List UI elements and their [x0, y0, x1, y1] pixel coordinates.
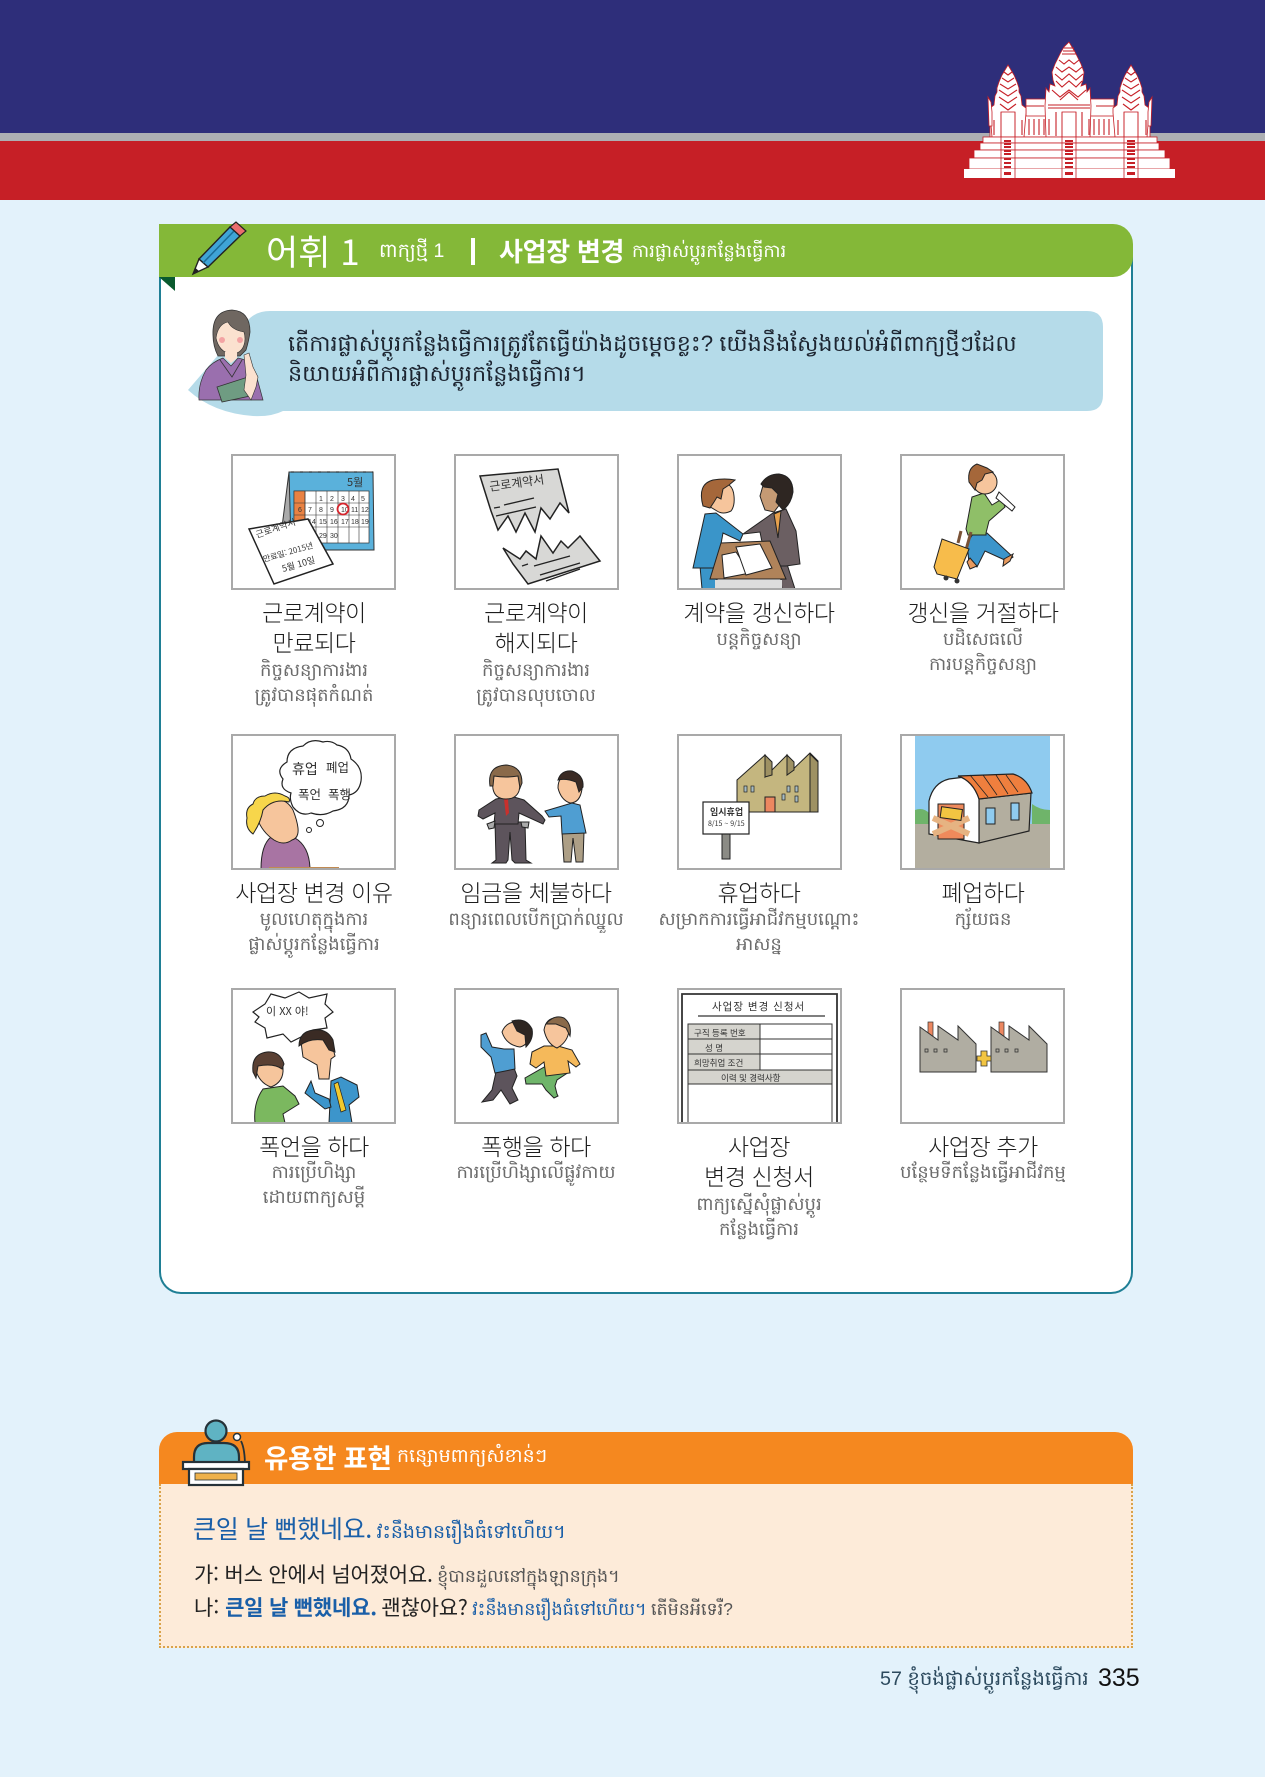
dialogue line B: 나: 큰일 날 뻔했네요. 괜찮아요? វះនឹងមានរឿងធំទៅហើយ។ តើមិនអីទេរឺ? [194, 1592, 733, 1622]
illustration: factory with closure sign [677, 734, 842, 870]
intro text: និយាយអំពីការផ្លាស់ប្តូរកន្លែងធ្វើការ។ [288, 361, 586, 386]
vocabulary item 7 [659, 734, 859, 954]
label: 사업장 추가 [928, 1128, 1038, 1162]
vocabulary item 1 [231, 454, 396, 707]
icon: teacher character [198, 310, 264, 402]
label: 사업장 변경 이유 [235, 874, 393, 908]
illustration: man thinking: 폭언 [298, 784, 321, 803]
translation: បន្ថែមទីកន្លែងធ្វើអាជីវកម្ម [900, 1162, 1066, 1182]
label [704, 1128, 814, 1192]
intro text [288, 329, 1017, 391]
illustration: man thinking: 폭행 [328, 784, 351, 803]
illustration: closed shop [900, 734, 1065, 870]
illustration: calendar and contract: 2 [330, 496, 334, 503]
illustration: calendar and contract: 14 [308, 519, 316, 526]
illustration: calendar and contract: 8 [319, 507, 323, 514]
illustration: calendar and contract: 7 [308, 507, 312, 514]
illustration: calendar and contract: 5월 10일 [280, 553, 317, 575]
illustration: man leaving with suitcase [900, 454, 1065, 590]
label: 근로계약이 [262, 594, 366, 628]
label: 휴업하다 [717, 874, 801, 908]
label [484, 594, 588, 658]
translation: ក្ស័យធន [955, 909, 1011, 929]
heading translation: កន្សោមពាក្យសំខាន់ៗ [397, 1446, 547, 1467]
orange header bar [159, 1432, 1133, 1484]
illustration: calendar and contract: 18 [351, 519, 359, 526]
vocabulary item 9 [231, 988, 396, 1208]
label: 폭언을 하다 [259, 1128, 369, 1162]
illustration: calendar and contract: 6 [298, 507, 302, 514]
dialogue line A: 가: 버스 안에서 넘어졌어요. ខ្ញុំបានដួលនៅក្នុងឡានក្រុង។ [194, 1559, 620, 1589]
translation: កិច្ចសន្យាការងារ [260, 660, 368, 680]
illustration: calendar and contract: 16 [330, 519, 338, 526]
vocabulary item 8 [900, 734, 1065, 930]
vocabulary item 5 [231, 734, 396, 958]
heading: vocabulary 1: 어휘 1 [266, 225, 360, 276]
expression headline: 큰일 날 뻔했네요. វះនឹងមានរឿងធំទៅហើយ។ [193, 1510, 566, 1546]
illustration: calendar and contract: 만료일: 2015년 [262, 540, 314, 565]
illustration: change application form: 희망취업 조건 [694, 1057, 743, 1069]
translation [255, 658, 373, 707]
illustration: calendar and contract: 29 [319, 533, 327, 540]
vocabulary item 6 [448, 734, 624, 933]
dotted border [159, 1484, 1133, 1648]
speech bubble with intro text [188, 311, 1103, 416]
translation [659, 908, 859, 954]
translation: ការប្រើហិង្សាលើផ្លូវកាយ [456, 1162, 616, 1182]
top banner: blue, grey and red bands with temple [0, 0, 1265, 200]
vocabulary item 4 [900, 454, 1065, 674]
translation: អាសន្ន [736, 934, 782, 954]
illustration: calendar and contract: 17 [341, 519, 349, 526]
vocabulary item 10 [454, 988, 619, 1186]
sub-heading: workplace change: 사업장 변경 [499, 232, 624, 269]
illustration: calendar and contract: 19 [361, 519, 369, 526]
illustration: calendar and contract: 1 [319, 496, 323, 503]
illustration: boss with empty pockets and worker [454, 734, 619, 870]
illustration: calendar and contract: 15 [319, 519, 327, 526]
sub-heading translation: ការផ្លាស់ប្តូរកន្លែងធ្វើការ [632, 241, 786, 261]
label: 근로계약이 [484, 594, 588, 628]
vocabulary item 11 [677, 988, 842, 1240]
translation: ការប្រើហិង្សា [272, 1162, 356, 1182]
translation: ត្រូវបានផុតកំណត់ [255, 685, 373, 705]
label: 계약을 갱신하다 [683, 594, 835, 628]
vocabulary item 3 [677, 454, 842, 650]
translation: ផ្លាស់ប្តូរកន្លែងធ្វើការ [248, 934, 380, 954]
translation: មូលហេតុក្នុងការ [260, 909, 368, 929]
translation: ពាក្យស្នើសុំផ្លាស់ប្តូរ [696, 1194, 822, 1214]
illustration: boss shouting at worker [231, 988, 396, 1124]
illustration: man thinking: 폐업 [326, 757, 349, 776]
icon: Angkor Wat temple [964, 42, 1175, 178]
grey stripe [0, 133, 1265, 141]
footer: page number: 335 [1098, 1664, 1140, 1692]
illustration: boss shouting at worker: 이 XX 야! [266, 1003, 309, 1019]
illustration: change application form: 사업장 변경 신청서 [712, 999, 805, 1014]
illustration: calendar and contract: 근로계약서 [254, 515, 297, 541]
illustration: calendar and contract: 10 [341, 507, 349, 514]
illustration: man thinking: 휴업 [292, 759, 318, 779]
label [262, 594, 366, 658]
translation [263, 1160, 365, 1208]
illustration: calendar and contract: 5월 [347, 474, 363, 490]
illustration: calendar and contract: 3 [341, 496, 345, 503]
panel body [159, 254, 1133, 1294]
vocabulary item 2 [454, 454, 619, 707]
label: 갱신을 거절하다 [907, 594, 1059, 628]
translation: បដិសេធលើ [943, 629, 1023, 649]
bubble shape [188, 311, 1103, 416]
translation: សម្រាកការធ្វើអាជីវកម្មបណ្តោះ [659, 909, 859, 929]
illustration: change application form: 구직 등록 번호 [694, 1027, 746, 1039]
illustration: calendar and contract: 30 [330, 533, 338, 540]
heading translation: ពាក្យថ្មី 1 [379, 240, 444, 262]
label: 임금을 체불하다 [460, 874, 612, 908]
illustration: torn contract [454, 454, 619, 590]
illustration: calendar and contract: 12 [361, 507, 369, 514]
translation [476, 658, 596, 707]
illustration: change application form: 성 명 [705, 1042, 723, 1054]
green header bar [159, 224, 1133, 277]
intro text: តើការផ្លាស់ប្តូរកន្លែងធ្វើការត្រូវតែធ្វើយ៉ាងដូចម្តេចខ្លះ? យើងនឹងស្វែងយល់អំពីពាក្យថ្មីៗដែល [288, 331, 1017, 356]
translation [929, 628, 1037, 674]
translation: ការបន្តកិច្ចសន្យា [929, 654, 1037, 674]
footer: chapter title: 57 ខ្ញុំចង់ផ្លាស់ប្តូរកន្លែងធ្វើការ [880, 1668, 1089, 1690]
illustration: calendar and contract: 4 [351, 496, 355, 503]
label: 폭행을 하다 [481, 1128, 591, 1162]
panel: useful expressions [159, 1432, 1133, 1648]
illustration: torn contract: 근로계약서 [488, 470, 545, 495]
label: 해지되다 [494, 624, 578, 658]
illustration: calendar and contract: 5 [361, 496, 365, 503]
translation: កិច្ចសន្យាការងារ [482, 660, 590, 680]
translation: ដោយពាក្យសម្តី [263, 1187, 365, 1207]
translation: បន្តកិច្ចសន្យា [716, 629, 802, 649]
translation [696, 1192, 822, 1240]
illustration: calendar and contract: 9 [330, 507, 334, 514]
illustration: factory with closure sign: 8/15 ~ 9/15 [708, 819, 745, 829]
label: 폐업하다 [941, 874, 1025, 908]
translation: ត្រូវបានលុបចោល [476, 685, 596, 705]
illustration: man thinking [231, 734, 396, 870]
translation: ពន្យារពេលបើកប្រាក់ឈ្នួល [448, 909, 624, 929]
illustration: two factories with plus [900, 988, 1065, 1124]
label: 사업장 [728, 1128, 790, 1162]
illustration: factory with closure sign: 임시휴업 [710, 805, 743, 818]
illustration: calendar and contract [231, 454, 396, 590]
illustration: man kicking another [454, 988, 619, 1124]
label: 변경 신청서 [704, 1158, 814, 1192]
illustration: change application form [677, 988, 842, 1124]
translation [248, 909, 380, 958]
panel: vocabulary 1 [159, 224, 1133, 1294]
icon: pencil [192, 221, 247, 276]
illustration: calendar and contract: 11 [351, 507, 358, 514]
corner fold [159, 277, 175, 291]
translation: កន្លែងធ្វើការ [719, 1219, 799, 1239]
vocabulary item 12 [900, 988, 1066, 1182]
heading: useful expressions: 유용한 표현 [264, 1437, 392, 1476]
separator [471, 238, 475, 265]
illustration: change application form: 이력 및 경력사항 [721, 1072, 781, 1084]
illustration: handshake over desk [677, 454, 842, 590]
red band [0, 141, 1265, 200]
label: 만료되다 [272, 624, 356, 658]
icon: speaker at lectern [180, 1418, 252, 1488]
